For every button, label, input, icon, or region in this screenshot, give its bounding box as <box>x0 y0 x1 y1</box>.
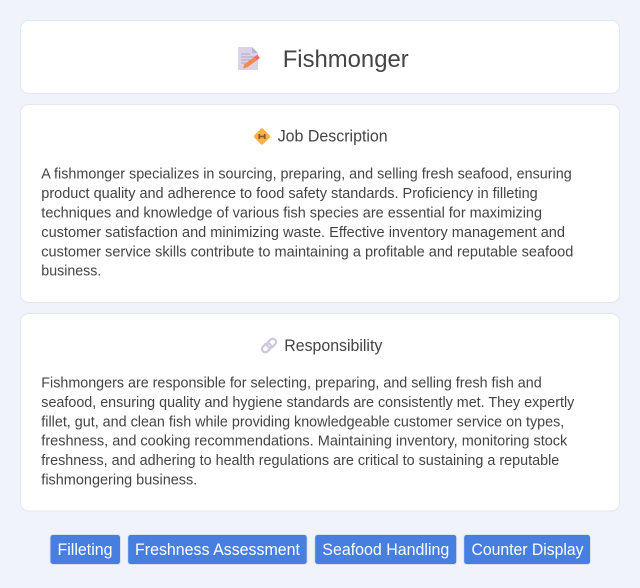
text block: responsibility: fillet, gut, and clean fish while providing knowledgeable customer service on types, <box>41 414 564 430</box>
panel: job description <box>20 104 620 302</box>
text block: responsibility: Fishmongers are responsible for selecting, preparing, and selling fresh fish and <box>41 375 542 391</box>
text block: job description: business. <box>41 264 101 280</box>
panel: responsibility <box>20 314 620 511</box>
text block: job description: customer service skills contribute to maintaining a profitable and reputable seafood <box>41 244 573 260</box>
text block: job description: techniques and knowledge of various fish species are essential for maximizing <box>41 205 542 221</box>
text block: responsibility <box>41 375 575 488</box>
panel: title card <box>20 20 620 94</box>
tag: filleting <box>50 534 120 564</box>
text block: responsibility: fishmongering business. <box>41 472 197 488</box>
text block: responsibility: freshness, and adhering to health regulations are critical to sustaining a reputable <box>41 453 559 469</box>
heading: responsibility: Responsibility <box>284 337 383 355</box>
text block: responsibility: seafood, ensuring quality and hygiene standards are consistently met. They expertly <box>41 395 575 411</box>
tag: seafood handling <box>315 534 457 564</box>
tag: freshness assessment <box>128 534 307 564</box>
text block: job description: customer satisfaction and minimizing waste. Effective inventory management and <box>41 225 565 241</box>
tag: seafood handling: Seafood Handling <box>322 541 449 559</box>
text block: job description: A fishmonger specializes in sourcing, preparing, and selling fresh seafood, ensuring <box>41 166 572 182</box>
icon: chain link <box>261 337 277 354</box>
icon: document with pencil <box>238 47 260 70</box>
icon: orange diamond sign <box>253 128 271 145</box>
heading: job description: Job Description <box>278 127 388 145</box>
tag: counter display: Counter Display <box>472 541 584 559</box>
tag: freshness assessment: Freshness Assessment <box>135 541 300 559</box>
title: Fishmonger <box>283 46 409 73</box>
tag: counter display <box>464 534 590 564</box>
skill tags <box>50 534 590 564</box>
text block: job description: product quality and adherence to food safety standards. Proficiency in filleting <box>41 186 538 202</box>
text block: responsibility: freshness, and cooking recommendations. Maintaining inventory, monitoring stock <box>41 433 568 449</box>
text block: job description <box>41 166 573 280</box>
tag: filleting: Filleting <box>58 541 112 559</box>
